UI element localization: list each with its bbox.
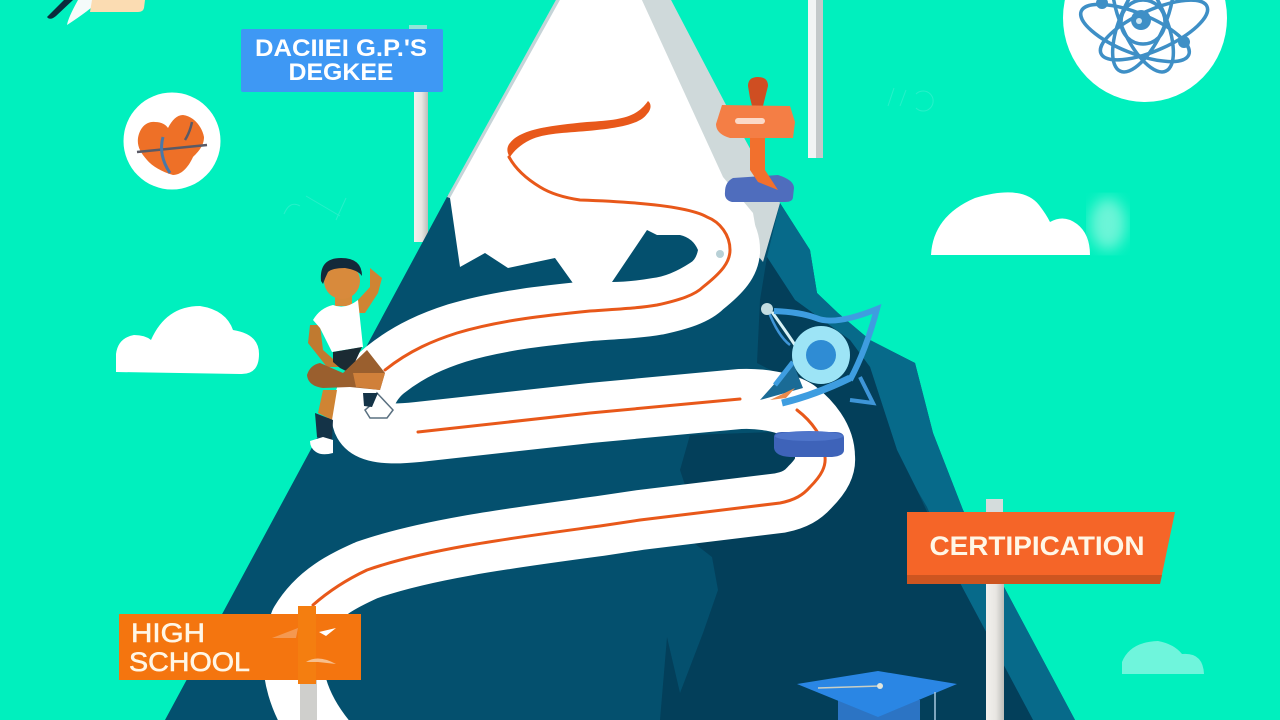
shirt [313, 300, 363, 352]
sign: bachelor's degree: DACIIEI G.P.'S [255, 35, 427, 62]
sock right [363, 393, 378, 407]
cloud: upper right [931, 192, 1126, 255]
road [293, 201, 825, 720]
small grey marker on road [716, 250, 724, 258]
knee [353, 373, 385, 390]
snow cap [447, 0, 780, 296]
shoe right [365, 393, 393, 418]
icon: heart in circle [124, 92, 220, 190]
mountain shadow area [660, 257, 1033, 720]
orange trail: middle segment [418, 399, 740, 432]
mountain right lit flank [767, 203, 1075, 720]
sign: certification [907, 499, 1175, 720]
sign: bachelor's degree: DEGKEE [288, 59, 394, 86]
sign: high school: HIGH [131, 618, 205, 648]
orange trail: upper segment [385, 101, 730, 370]
sign: certification: CERTIPICATION [930, 531, 1144, 561]
cloud: left [116, 306, 259, 374]
shorts [333, 347, 362, 373]
faint doodle marks [284, 88, 933, 220]
shin [318, 390, 337, 420]
lap [307, 350, 385, 390]
sock [315, 413, 333, 440]
head [324, 263, 360, 299]
mountain [165, 195, 1075, 720]
sign: high school: SCHOOL [129, 647, 250, 677]
thick orange ribbon [507, 101, 651, 157]
left arm [308, 325, 342, 367]
icon: graduation cap [797, 671, 957, 720]
signpost: orange marker on plinth [716, 77, 795, 202]
sign: bachelor's degree [241, 29, 443, 92]
shoe left [310, 437, 333, 454]
road hole: dark shape inside the upper bend [612, 230, 698, 282]
hair [321, 258, 362, 284]
raised arm [358, 268, 382, 313]
icon: blue atom gadget [760, 303, 877, 403]
plinth: blue disc on road [774, 431, 844, 457]
neck [335, 292, 352, 306]
figure: seated student [307, 258, 393, 454]
icon: atom in circle [1063, 0, 1227, 102]
white pole top centre right [808, 0, 823, 158]
sign: high school [119, 606, 361, 720]
pole: bachelor's degree sign post [409, 25, 428, 242]
cloud: lower right [1122, 641, 1204, 674]
road: orange centre line lower [313, 410, 825, 605]
icon: partial hand at top left [47, 0, 145, 25]
